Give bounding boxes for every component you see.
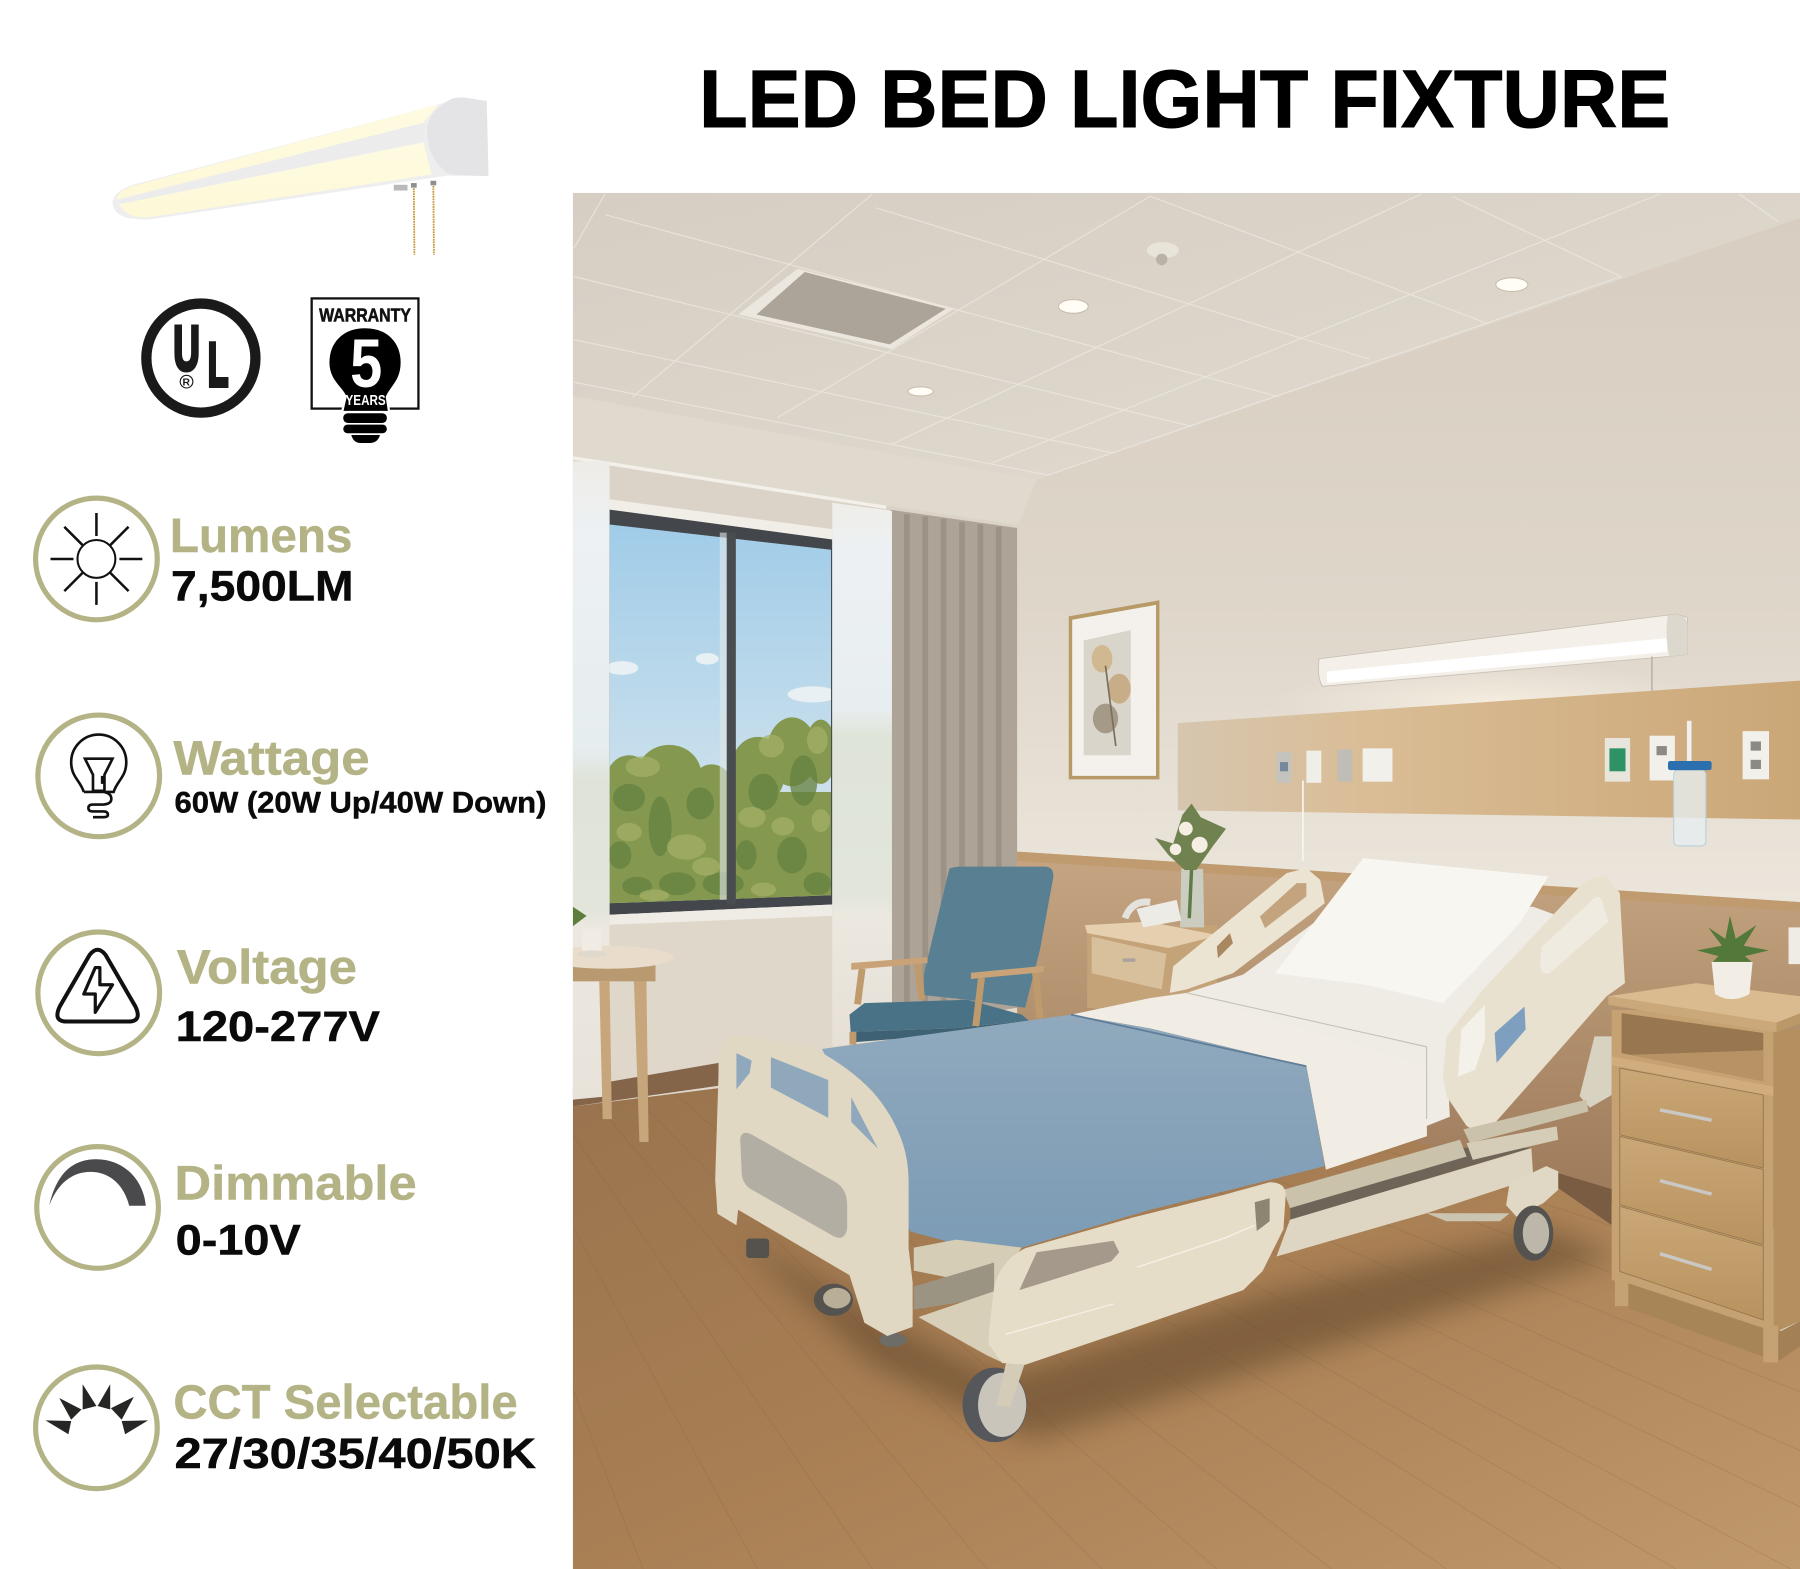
curtain rail (573, 458, 886, 507)
foot caster stub (879, 1333, 907, 1347)
baseboard (573, 1063, 719, 1106)
label: Wattage (173, 732, 370, 786)
side table with cup (572, 906, 674, 1142)
right wall (1017, 218, 1800, 918)
label: CCT Selectable (173, 1376, 518, 1430)
front wheel (963, 1362, 1027, 1442)
label: Voltage (177, 941, 357, 995)
left sheer curtain (573, 461, 610, 1100)
right nightstand (1608, 983, 1800, 1362)
gray drape curtain (890, 510, 1017, 1027)
bedside cord (1302, 780, 1304, 861)
label: Dimmable (174, 1156, 417, 1210)
near side rail (988, 1182, 1286, 1365)
value: 120-277V (176, 1003, 381, 1050)
blue armchair (849, 867, 1053, 1044)
hospital bed (715, 858, 1625, 1442)
soffit (573, 397, 1037, 528)
pull cord (1651, 656, 1652, 691)
air vent (738, 269, 954, 349)
small nightstand (1084, 922, 1217, 1009)
oxygen humidifier bottle (1668, 721, 1712, 846)
ceiling with tiles (573, 193, 1800, 480)
product image: LED bed light fixture (112, 97, 488, 255)
spec: lumens (36, 498, 354, 620)
telephone (1125, 900, 1181, 927)
icon: UL certification mark: U (173, 314, 200, 384)
foot board (715, 1036, 913, 1336)
icon: light bulb (38, 715, 160, 837)
mattress head section (1187, 907, 1586, 1126)
foot bumper (746, 1238, 769, 1258)
pillow (1275, 858, 1548, 1003)
icon: half sun rays (36, 1367, 157, 1489)
floor (572, 1022, 1800, 1569)
wall outlets right (1605, 731, 1769, 782)
icon: dimmer arc (37, 1147, 158, 1268)
flower vase (1155, 803, 1226, 927)
lower left wall (610, 916, 813, 926)
icon: 5 year warranty badge: 5 (350, 325, 382, 402)
wall outlets left (1277, 748, 1392, 783)
floor shadow under bed (735, 1228, 1619, 1440)
label: Lumens (170, 509, 352, 563)
value: 0-10V (176, 1217, 302, 1264)
icon: UL certification mark (146, 304, 255, 413)
photo: hospital room (572, 193, 1800, 1569)
icon: high voltage triangle (38, 932, 160, 1054)
wall art (1069, 600, 1159, 779)
value: 60W (20W Up/40W Down) (174, 787, 546, 820)
recessed lights (908, 278, 1528, 396)
tree line (606, 717, 837, 907)
icon: 5 year warranty badge: YEARS (346, 392, 386, 409)
near head rail (1443, 876, 1625, 1136)
title: LED BED LIGHT FIXTURE (699, 54, 1670, 145)
small foot wheel (814, 1284, 853, 1316)
spec: CCT selectable (36, 1367, 536, 1489)
blanket edge stripe (1071, 1015, 1306, 1066)
potted plant (1697, 916, 1769, 999)
smoke detector (1147, 242, 1179, 265)
drawers (1620, 1068, 1763, 1320)
icon: 5 year warranty badge: WARRANTY (319, 304, 411, 325)
value: 7,500LM (171, 562, 354, 609)
wall above window (573, 458, 1037, 918)
wall outlet at wainscot (1789, 927, 1800, 964)
wall mounted LED fixture (1318, 614, 1688, 686)
white sheet (1071, 993, 1427, 1170)
value: 27/30/35/40/50K (174, 1430, 536, 1477)
wood wainscot (1017, 852, 1800, 1234)
wood headwall panel (1178, 681, 1800, 820)
sheet fold line (1187, 993, 1427, 1119)
spec: wattage (38, 715, 546, 837)
far head rail (1170, 868, 1325, 993)
spec: dimmable (37, 1147, 417, 1268)
plinth and legs (1615, 1277, 1778, 1362)
icon: UL certification mark: L (208, 331, 228, 400)
spec: voltage (38, 932, 381, 1054)
blue blanket (822, 1015, 1325, 1272)
rear wheel (1513, 1206, 1553, 1261)
drawer handles (1660, 1110, 1712, 1269)
icon: sun (36, 498, 157, 620)
right sheer curtain (832, 503, 892, 1047)
window with view (606, 499, 838, 926)
icon: UL certification mark: R (183, 378, 191, 389)
bed frame and mechanism (914, 1036, 1612, 1362)
icon: 5 year warranty badge (312, 298, 418, 443)
